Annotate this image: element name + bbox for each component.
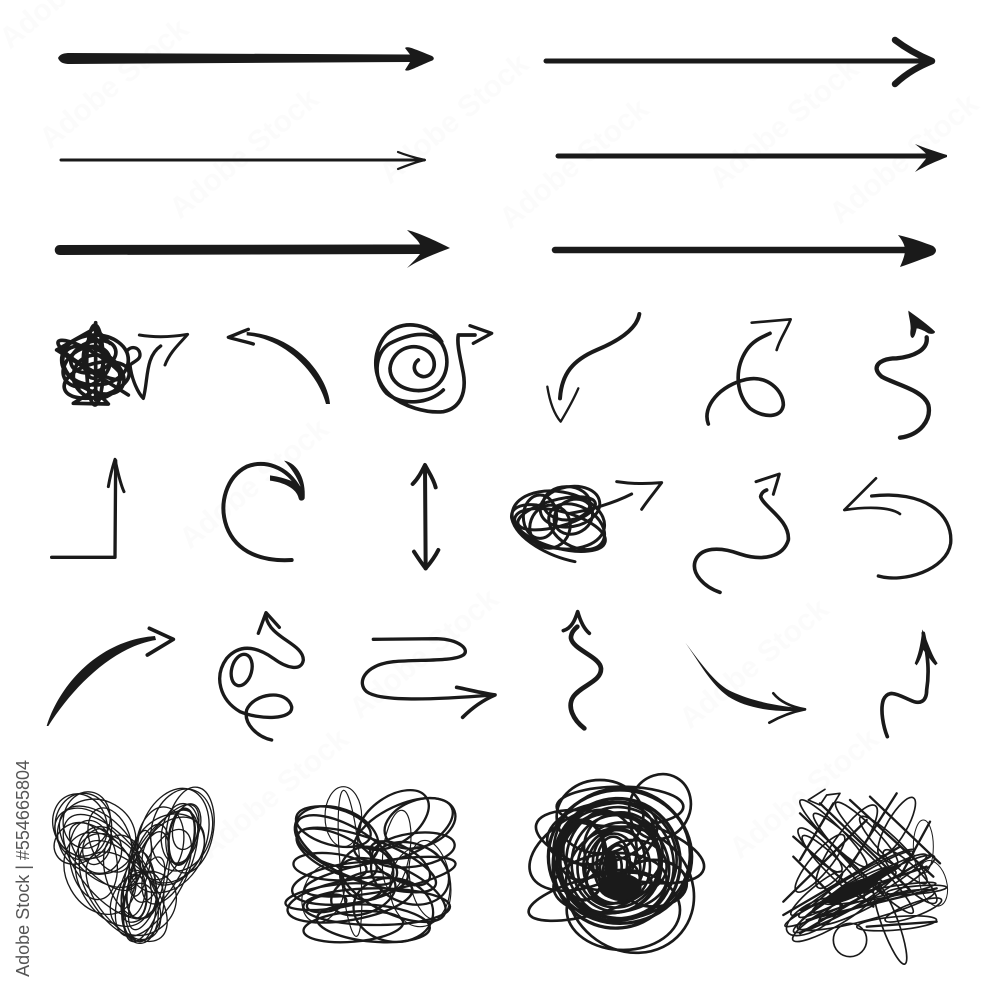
arrow: L shape up: [52, 459, 124, 557]
arrow: C shape: [223, 461, 305, 560]
watermark pattern: Adobe Stock: [193, 722, 355, 865]
arrow: thick tapered left row 1: [58, 47, 434, 71]
watermark pattern: Adobe Stock: [823, 87, 985, 230]
scribble with arrow: [54, 323, 188, 405]
watermark pattern: Adobe Stock: [163, 82, 325, 225]
arrow: s-curve down: [547, 314, 639, 422]
arrow: wavy up: [563, 612, 601, 728]
arrow: curve up right: [47, 628, 173, 726]
arrow: thin left row 2: [61, 152, 425, 169]
scribble: sharp hatched tangle: [781, 789, 952, 967]
watermark pattern: Adobe Stock: [173, 412, 335, 555]
side credit text: Adobe Stock | #554665804: [13, 760, 33, 977]
scribbles right bottom: [516, 763, 952, 979]
scribble with arrow: [507, 482, 662, 562]
arrows group: zoom right rows: [507, 311, 951, 592]
arrows group: zoom left rows: [52, 323, 492, 568]
watermark pattern: Adobe Stock: [373, 47, 535, 190]
scribble: heart: [44, 778, 222, 956]
arrow: snake up: [877, 311, 935, 438]
arrow: loop up right: [707, 319, 791, 424]
watermark pattern: Adobe Stock: [33, 12, 195, 155]
scribbles left bottom: [44, 778, 462, 956]
watermark pattern: Adobe Stock: [673, 592, 835, 735]
watermark pattern: Adobe Stock: [493, 92, 655, 235]
arrow: snake right: [362, 639, 495, 717]
arrow: right row 2: [558, 144, 947, 172]
arrow: right row 3: [555, 235, 936, 267]
arrow: s-curve up right: [694, 474, 788, 592]
spiral with arrow: [376, 325, 492, 412]
watermark pattern: Adobe Stock: [703, 52, 865, 195]
scribble: tangled loops: [284, 778, 462, 948]
arrows group: row 3 right: [563, 612, 938, 737]
arrow: loopy up: [220, 613, 303, 740]
arrow: double vertical: [413, 465, 438, 568]
arrow: return loop: [844, 478, 951, 578]
arrow: thick left row 3: [55, 230, 450, 268]
arrow: zigzag up: [882, 629, 938, 737]
arrows group: row 3 left: [47, 613, 495, 740]
arrow: curved left: [228, 329, 330, 404]
watermark pattern: Adobe Stock: [343, 582, 505, 725]
watermark pattern: Adobe Stock: [723, 722, 885, 865]
scribble: dense ball: [516, 763, 720, 979]
arrow: right row 1: [546, 40, 932, 84]
arrow: curve down right: [685, 643, 806, 723]
